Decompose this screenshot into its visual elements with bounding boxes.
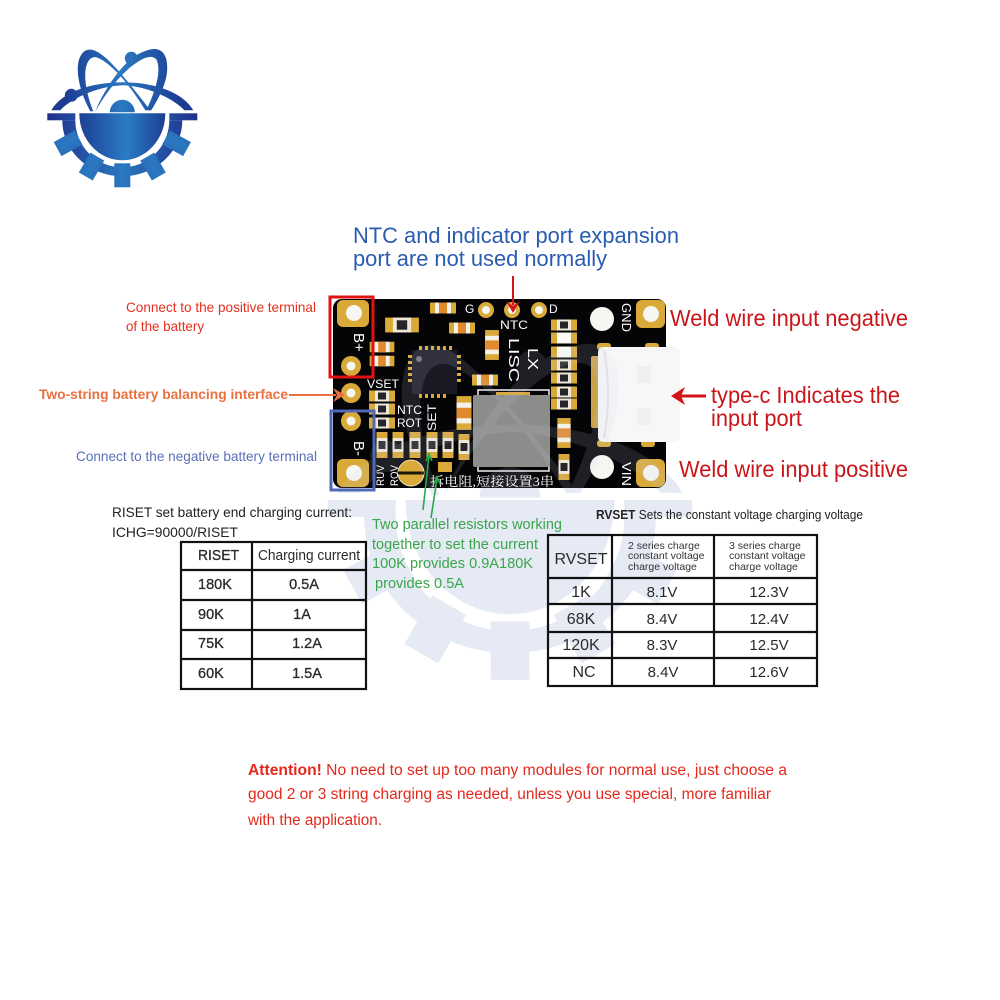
table: RVSET: 68K xyxy=(567,611,596,628)
board silk labels: NTC xyxy=(397,403,422,417)
table: RVSET: 120K xyxy=(562,637,600,654)
table: RVSET: 12.5V xyxy=(749,637,789,654)
heading: NTC note: port are not used normally xyxy=(353,246,607,271)
attention note xyxy=(247,762,787,829)
board silk labels: VIN xyxy=(619,462,634,486)
note: parallel resistors xyxy=(372,517,562,592)
board silk labels: NTC xyxy=(500,318,528,332)
arrow: type-c xyxy=(671,387,706,405)
heading: NTC note xyxy=(353,223,679,271)
board silk labels: SET xyxy=(427,404,439,431)
label: weld positive: Weld wire input positive xyxy=(679,456,908,482)
table: RVSET: 8.3V xyxy=(647,637,677,654)
heading: NTC note: NTC and indicator port expansion xyxy=(353,223,679,248)
watermark logo xyxy=(328,344,692,680)
RVSET heading: RVSET Sets the constant voltage charging voltage xyxy=(596,508,863,522)
attention note: with the application. xyxy=(247,812,382,829)
table: RVSET: charge voltage xyxy=(729,561,798,573)
note: parallel resistors: provides 0.5A xyxy=(375,576,464,592)
board silk labels: B+ xyxy=(350,333,367,352)
note: parallel resistors: Two parallel resistors working xyxy=(372,517,562,533)
IC chip xyxy=(408,346,461,398)
table: RISET: 1.2A xyxy=(292,636,322,652)
table: RISET: 1.5A xyxy=(292,666,322,682)
table: RISET: 180K xyxy=(198,577,232,593)
board silk labels: ROT xyxy=(397,416,423,430)
red box: B+ xyxy=(330,297,373,377)
circuit board xyxy=(333,299,683,498)
table: RISET: 0.5A xyxy=(289,577,319,593)
table: RISET: 75K xyxy=(198,636,224,652)
table: RVSET: charge voltage xyxy=(628,561,697,573)
board silk labels xyxy=(350,302,634,489)
arrow: balancing interface xyxy=(289,388,345,402)
table: RISET: RISET xyxy=(198,548,239,564)
board silk labels: 拆电阻,短接设置3串 xyxy=(430,474,554,489)
label: type-c xyxy=(711,382,900,431)
table: RVSET: constant voltage xyxy=(729,550,806,562)
table: RVSET: 3 series charge xyxy=(729,540,801,552)
label: type-c: input port xyxy=(711,405,803,431)
attention note: good 2 or 3 string charging as needed, unless you use special, more familiar xyxy=(248,786,771,803)
terminal pads xyxy=(337,300,665,487)
USB type-c connector xyxy=(591,343,680,447)
table: RVSET: 8.1V xyxy=(647,584,677,601)
note: parallel resistors: together to set the current xyxy=(372,537,538,553)
table: RVSET: 8.4V xyxy=(648,664,678,681)
table: RISET: 1A xyxy=(293,607,311,623)
table: RISET xyxy=(181,542,366,689)
board silk labels: RUV xyxy=(375,464,387,486)
board silk labels: B- xyxy=(350,441,367,456)
board silk labels: LX xyxy=(524,348,541,370)
board silk labels: VSET xyxy=(367,379,399,391)
label: weld negative: Weld wire input negative xyxy=(670,305,908,331)
table: RVSET: constant voltage xyxy=(628,550,705,562)
label: type-c: type-c Indicates the xyxy=(711,382,900,408)
table: RISET: 60K xyxy=(198,666,224,682)
table: RVSET: 12.4V xyxy=(749,611,789,628)
board silk labels: G xyxy=(465,302,474,316)
table: RVSET xyxy=(548,535,817,686)
board silk labels: D xyxy=(549,302,558,316)
board silk labels: LISC xyxy=(505,338,522,382)
board silk labels: ROV xyxy=(389,464,401,486)
table: RVSET: 12.3V xyxy=(749,584,789,601)
table: RVSET: 1K xyxy=(571,584,591,601)
RISET heading: ICHG=90000/RISET xyxy=(112,524,238,540)
arrow: NTC pad xyxy=(506,276,520,313)
trimmer screw xyxy=(398,460,424,486)
label: positive terminal xyxy=(126,299,316,334)
label: positive terminal: Connect to the positive terminal xyxy=(126,299,316,315)
table: RVSET: RVSET xyxy=(554,551,608,568)
components xyxy=(430,302,456,314)
board silk labels: GND xyxy=(619,303,634,332)
logo xyxy=(47,49,197,187)
table: RVSET: 12.6V xyxy=(749,664,789,681)
table: RISET: 90K xyxy=(198,607,224,623)
watermark over board xyxy=(340,344,666,488)
table: RVSET: NC xyxy=(572,664,596,681)
RISET heading: RISET set battery end charging current: xyxy=(112,504,352,520)
note: parallel resistors: 100K provides 0.9A180K xyxy=(372,556,533,572)
label: positive terminal: of the battery xyxy=(126,318,204,334)
inductor xyxy=(473,390,550,471)
table: RVSET: 2 series charge xyxy=(628,540,700,552)
RISET heading xyxy=(112,504,352,540)
table: RVSET: 8.4V xyxy=(647,611,677,628)
table: RISET: Charging current xyxy=(258,548,360,564)
blue box: B- xyxy=(331,411,374,490)
label: balancing interface: Two-string battery balancing interface xyxy=(39,387,288,402)
label: negative terminal: Connect to the negative battery terminal xyxy=(76,448,317,464)
attention note: Attention! No need to set up too many modules for normal use, just choose a xyxy=(248,762,787,779)
arrows: parallel resistors xyxy=(423,454,440,518)
